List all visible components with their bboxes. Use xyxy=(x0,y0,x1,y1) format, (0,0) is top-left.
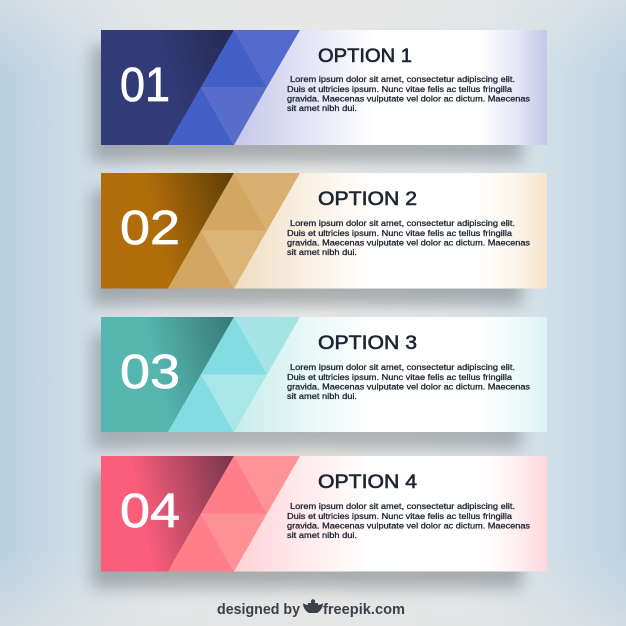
footer credit: freepik.com xyxy=(323,601,405,618)
heading: OPTION 1 xyxy=(318,46,412,67)
body text: Duis et ultricies ipsum. Nunc vitae felis ac tellus fringilla xyxy=(287,228,512,238)
icon: freepik logo xyxy=(303,599,323,613)
body text: gravida. Maecenas vulputate vel dolor ac dictum. Maecenas xyxy=(287,520,530,530)
number 01: 01 xyxy=(120,59,170,112)
heading: OPTION 4 xyxy=(318,472,417,493)
footer credit: designed by xyxy=(217,601,301,618)
body text: gravida. Maecenas vulputate vel dolor ac dictum. Maecenas xyxy=(287,382,530,392)
body text: Duis et ultricies ipsum. Nunc vitae felis ac tellus fringilla xyxy=(287,84,512,94)
number block: 03 xyxy=(101,317,234,432)
body text: Lorem ipsum dolor sit amet, consectetur adipiscing elit. xyxy=(290,218,515,228)
panel: option 4 xyxy=(92,456,547,588)
body text: Lorem ipsum dolor sit amet, consectetur adipiscing elit. xyxy=(290,501,515,511)
triangle facets xyxy=(168,30,300,145)
body text: gravida. Maecenas vulputate vel dolor ac dictum. Maecenas xyxy=(287,94,530,104)
heading: OPTION 2 xyxy=(318,189,417,210)
body text: sit amet nibh dui. xyxy=(287,103,357,113)
body text: sit amet nibh dui. xyxy=(287,247,357,257)
number 02: 02 xyxy=(120,202,180,255)
footer credit xyxy=(217,599,405,618)
heading: OPTION 3 xyxy=(318,333,417,354)
triangle facets xyxy=(168,317,300,432)
body text: Duis et ultricies ipsum. Nunc vitae felis ac tellus fringilla xyxy=(287,372,512,382)
body text: Lorem ipsum dolor sit amet, consectetur adipiscing elit. xyxy=(290,74,515,84)
number block: 01 xyxy=(101,30,234,145)
body text: Duis et ultricies ipsum. Nunc vitae felis ac tellus fringilla xyxy=(287,511,512,521)
number 04: 04 xyxy=(120,485,180,538)
triangle facets xyxy=(168,456,300,572)
number block: 02 xyxy=(101,173,234,288)
panel: option 2 xyxy=(92,173,547,305)
body text: sit amet nibh dui. xyxy=(287,391,357,401)
body text: sit amet nibh dui. xyxy=(287,530,357,540)
number block: 04 xyxy=(101,456,234,572)
panel: option 3 xyxy=(92,317,547,449)
body text: Lorem ipsum dolor sit amet, consectetur adipiscing elit. xyxy=(290,362,515,372)
body text: gravida. Maecenas vulputate vel dolor ac dictum. Maecenas xyxy=(287,238,530,248)
panel: option 1 xyxy=(92,30,547,162)
number 03: 03 xyxy=(120,346,180,399)
triangle facets xyxy=(168,173,300,288)
